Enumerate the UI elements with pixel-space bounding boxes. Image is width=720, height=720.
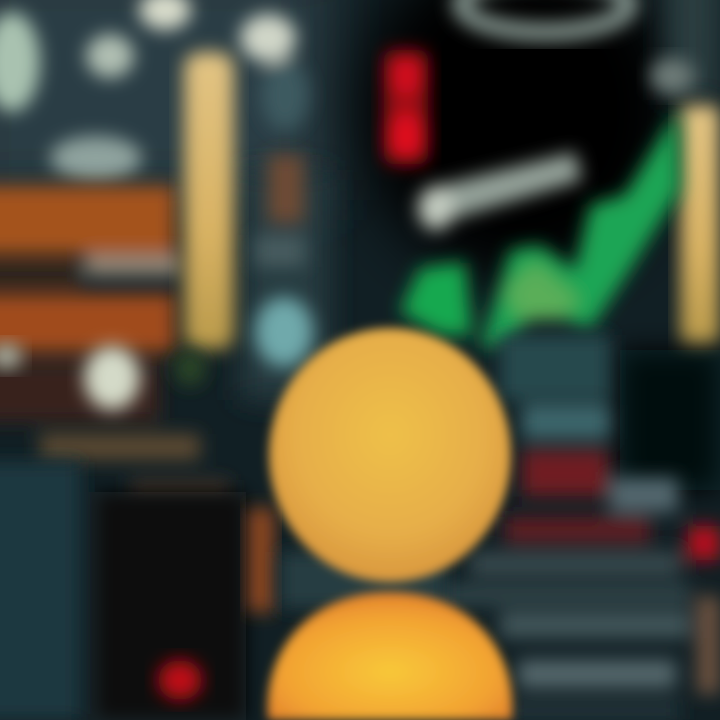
candlestick: right gold bar	[680, 105, 720, 343]
panel: centre left column	[240, 170, 330, 400]
icon: main gold coin	[269, 328, 511, 582]
icon: lower gold coin	[267, 592, 513, 720]
panel: dark right block	[620, 350, 720, 490]
panel: orange shelves	[0, 186, 230, 500]
ring: top ellipse	[461, 0, 629, 32]
light blob: lower left	[84, 346, 140, 410]
candlestick: left gold bar	[184, 52, 234, 350]
edge: orange coin shadow	[248, 508, 274, 612]
light blobs: upper left	[0, 0, 309, 180]
panel: right edge slate	[665, 0, 720, 100]
panel: dark upper centre	[360, 0, 680, 280]
text blob: blurred label	[418, 152, 582, 230]
small blob: upper right	[650, 58, 694, 94]
panel: lower left dark blocks	[0, 462, 246, 720]
panel: upper left slate wall	[0, 0, 330, 200]
lower teal strip	[280, 552, 445, 608]
icon: red dot	[158, 660, 202, 700]
candlestick: red bar	[384, 50, 428, 164]
light blob: far left	[0, 343, 22, 369]
line chart: green area	[400, 110, 680, 350]
small blobs: centre left	[174, 155, 313, 386]
panel: stacked steps	[440, 335, 720, 720]
